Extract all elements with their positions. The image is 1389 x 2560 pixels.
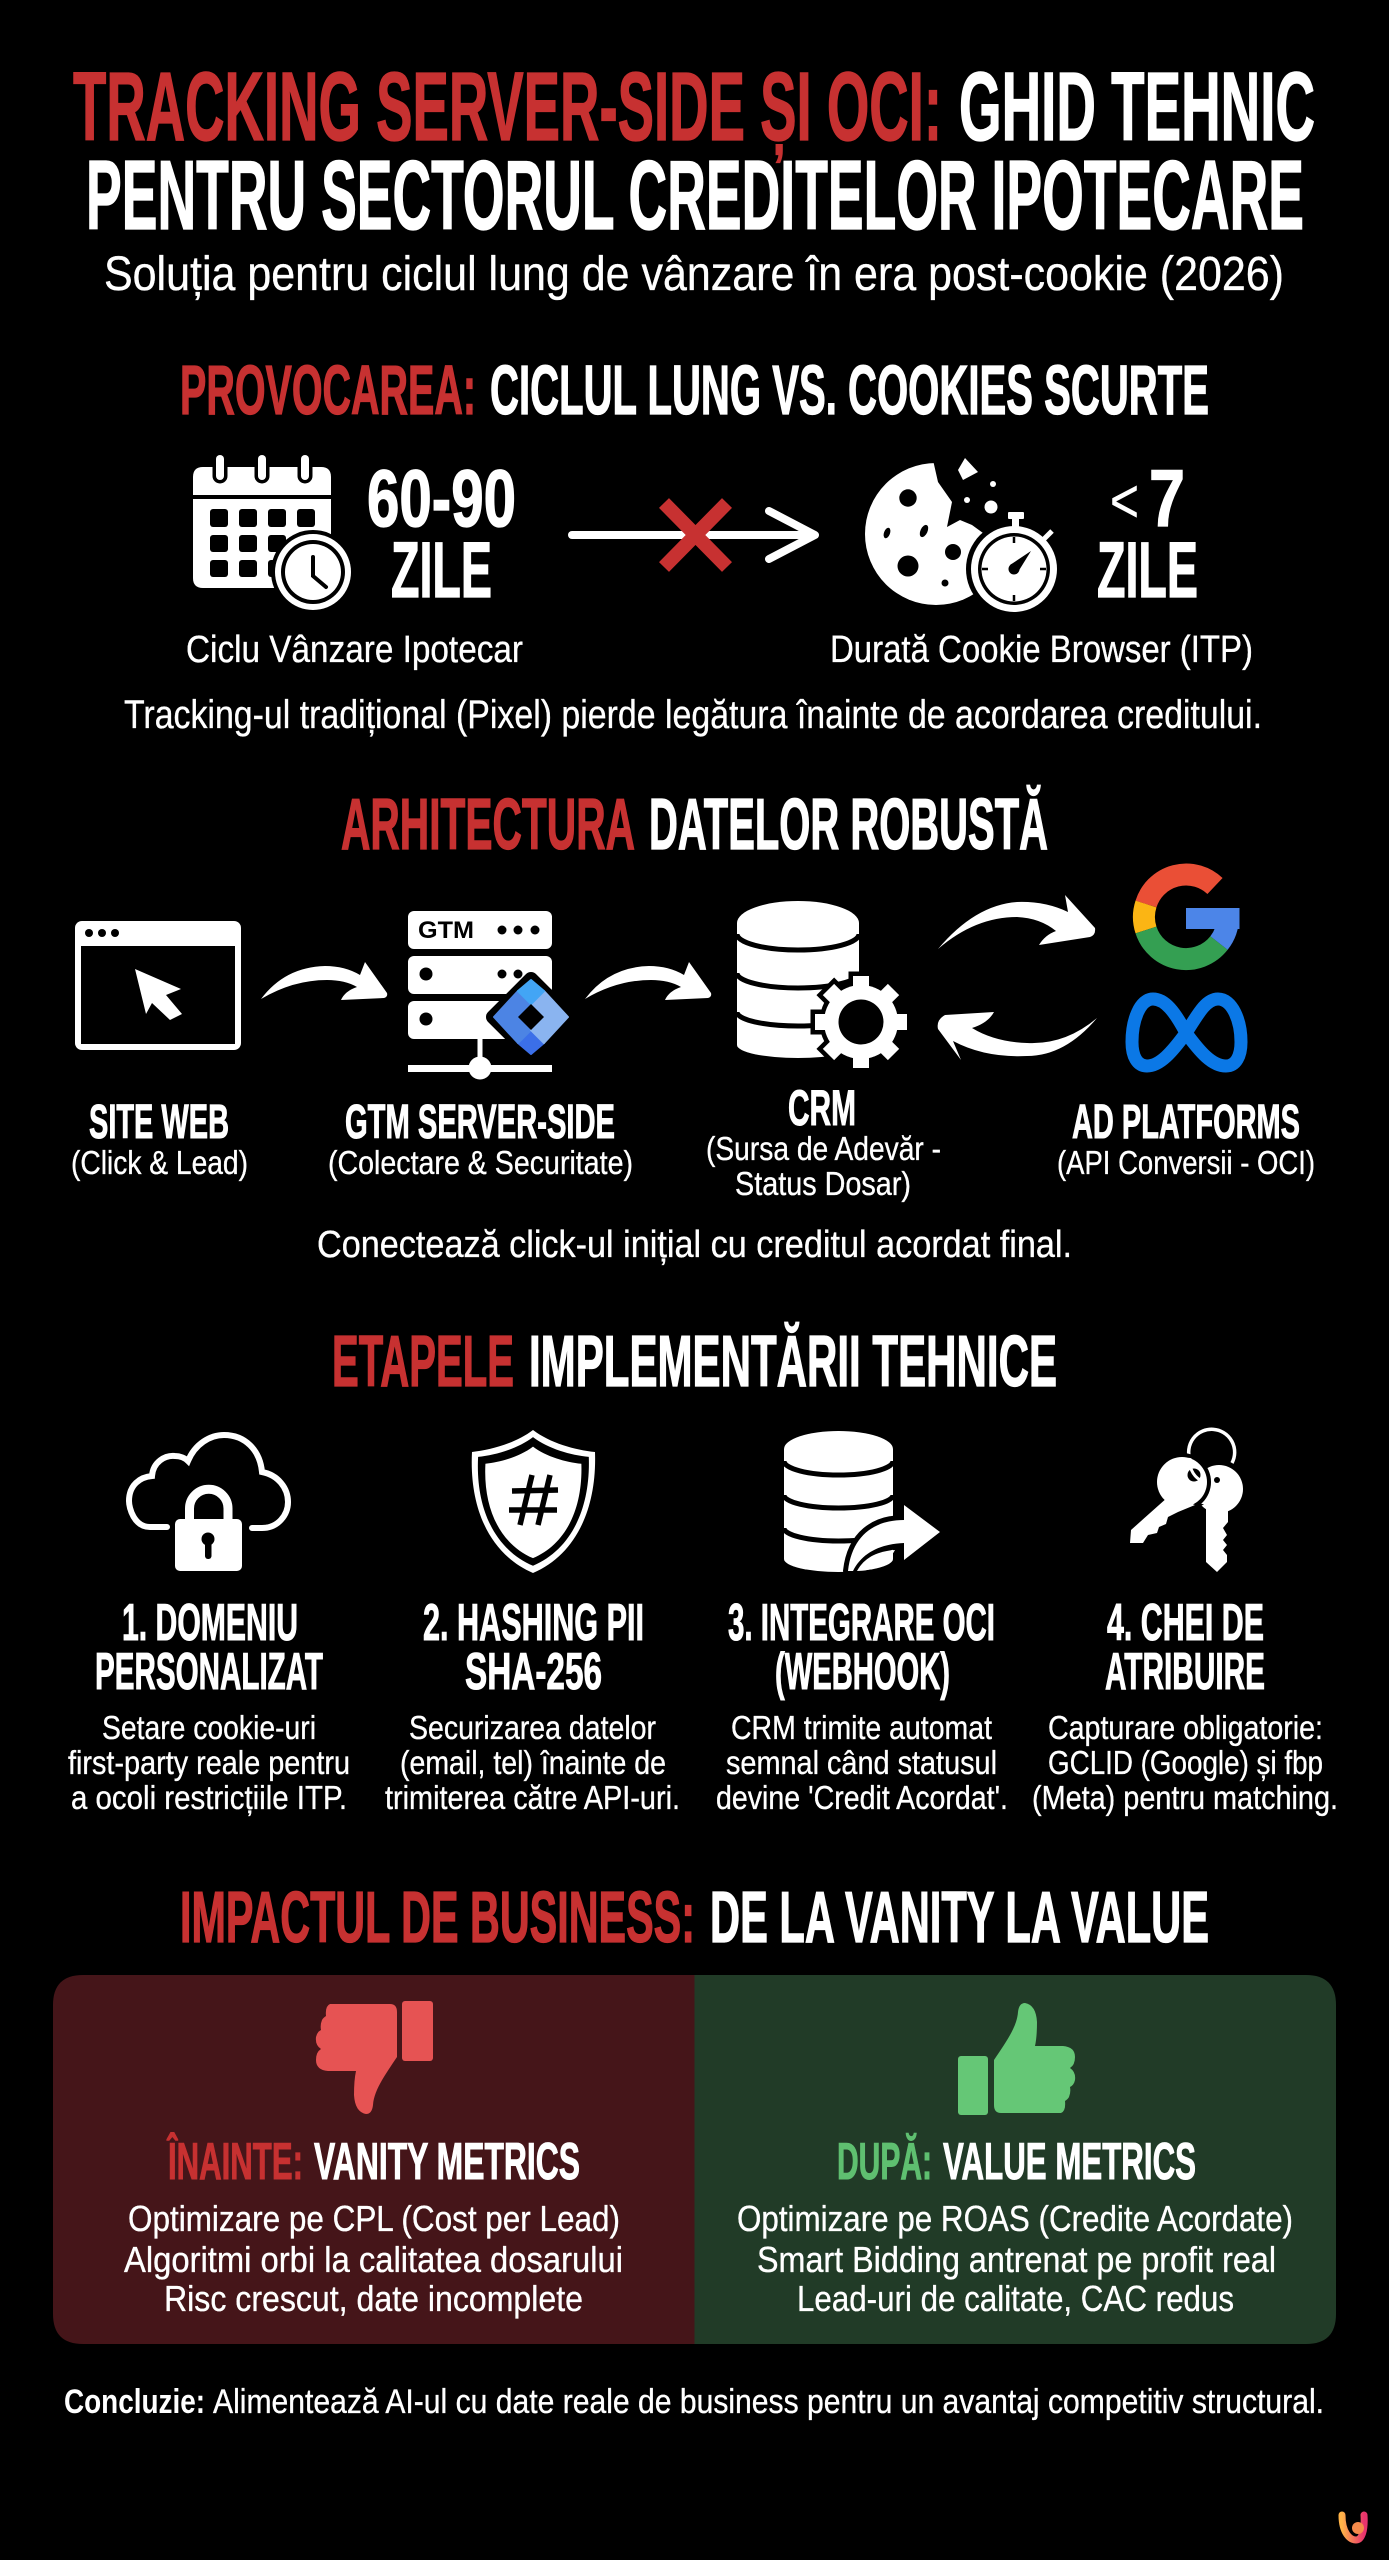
label: ad platforms [1057, 1096, 1315, 1181]
step 2 [385, 1594, 680, 1816]
step 4: GCLID (Google) și fbp [1048, 1744, 1323, 1781]
icon: calendar with clock [193, 459, 355, 614]
step 3: (WEBHOOK) [775, 1643, 950, 1701]
text: inainte list: Optimizare pe CPL (Cost per Lead) [128, 2198, 620, 2239]
icon: google [1144, 874, 1240, 959]
icon: meta [1132, 999, 1241, 1066]
step 1: a ocoli restricțiile ITP. [71, 1779, 347, 1816]
step 2: SHA-256 [465, 1643, 602, 1701]
heading: arhitectura: DATELOR ROBUSTĂ [649, 785, 1048, 865]
step 1 [68, 1594, 350, 1816]
label: site web [71, 1096, 248, 1181]
text: dupa list: Smart Bidding antrenat pe profit real [757, 2239, 1276, 2280]
label: inainte [166, 2132, 580, 2191]
arrow: site to gtm [261, 962, 387, 1000]
arrow: platforms to crm [938, 1012, 1097, 1060]
stat: 60-90 zile [367, 454, 516, 614]
stat: 60-90 zile: ZILE [391, 525, 492, 614]
label: ad platforms: (API Conversii - OCI) [1057, 1144, 1315, 1181]
label: crm [706, 1080, 941, 1202]
step 3: semnal când statusul [726, 1744, 997, 1781]
text: inainte list: Risc crescut, date incomplete [164, 2278, 583, 2319]
icon: gtm server [408, 911, 569, 1080]
subtitle: Soluția pentru ciclul lung de vânzare în era post-cookie (2026) [104, 248, 1284, 301]
panel: inainte [53, 1975, 694, 2344]
heading: arhitectura: ARHITECTURA [341, 785, 635, 865]
stat: sub 7 zile: ZILE [1097, 525, 1198, 614]
step 4 [1032, 1594, 1338, 1816]
label: site web: (Click & Lead) [71, 1144, 248, 1181]
step 1: first-party reale pentru [68, 1744, 350, 1781]
text: dupa list [737, 2198, 1293, 2319]
stat: sub 7 zile: < [1110, 467, 1139, 536]
stat: sub 7 zile: 7 [1149, 454, 1185, 544]
panel: dupa [694, 1975, 1336, 2344]
arrow: crm to platforms [938, 895, 1095, 949]
step 3: 3. INTEGRARE OCI [728, 1594, 995, 1652]
heading: provocarea [180, 351, 1209, 429]
label: crm: Status Dosar) [735, 1165, 911, 1202]
icon: thumbs up [958, 2003, 1075, 2115]
icon: hash shield [472, 1430, 595, 1573]
icon: cloud lock [129, 1435, 288, 1571]
icon: keys [1130, 1429, 1243, 1572]
heading: etapele: ETAPELE [332, 1322, 514, 1402]
label: gtm server-side: GTM SERVER-SIDE [345, 1096, 615, 1149]
step 1: Setare cookie-uri [102, 1709, 316, 1746]
text: conecteaza: Conectează click-ul inițial cu creditul acordat final. [317, 1224, 1072, 1266]
panel: provocarea [124, 351, 1262, 737]
label: crm: CRM [788, 1080, 856, 1136]
icon: gtm server: GTM [418, 917, 474, 944]
heading: etapele [332, 1322, 1057, 1402]
step 2: 2. HASHING PII [423, 1594, 644, 1652]
arrow: broken link [572, 503, 815, 567]
step 3: devine 'Credit Acordat'. [716, 1779, 1008, 1816]
icon: thumbs down [316, 2001, 433, 2114]
step 3 [716, 1594, 1008, 1816]
text: dupa list: Optimizare pe ROAS (Credite Acordate) [737, 2198, 1293, 2239]
step 3: CRM trimite automat [731, 1709, 992, 1746]
step 4: Capturare obligatorie: [1048, 1709, 1323, 1746]
label: gtm server-side: (Colectare & Securitate) [328, 1144, 633, 1181]
label: durata cookie: Durată Cookie Browser (ITP) [830, 629, 1253, 671]
panel: etapele [68, 1322, 1338, 1816]
label: crm: (Sursa de Adevăr - [706, 1130, 941, 1167]
heading: impact: IMPACTUL DE BUSINESS: [180, 1878, 695, 1958]
stat: sub 7 zile [1097, 454, 1198, 614]
stat: 60-90 zile: 60-90 [367, 454, 516, 544]
label: inainte: ÎNAINTE: [166, 2132, 303, 2191]
title [73, 52, 1315, 250]
label: dupa: DUPĂ: [837, 2133, 932, 2191]
label: ciclu vanzare: Ciclu Vânzare Ipotecar [186, 629, 523, 671]
text: inainte list [124, 2198, 623, 2319]
step 1: 1. DOMENIU [122, 1594, 298, 1652]
label: gtm server-side [328, 1096, 633, 1181]
step 4: (Meta) pentru matching. [1032, 1779, 1338, 1816]
step 4: ATRIBUIRE [1105, 1643, 1265, 1701]
step 1: PERSONALIZAT [95, 1643, 323, 1701]
text: dupa list: Lead-uri de calitate, CAC redus [797, 2278, 1234, 2319]
step 2: trimiterea către API-uri. [385, 1779, 680, 1816]
icon: database share [784, 1431, 940, 1572]
icon: browser window [75, 921, 241, 1050]
text: inainte list: Algoritmi orbi la calitatea dosarului [124, 2239, 623, 2280]
arrow: gtm to crm [585, 962, 711, 1000]
step 2: Securizarea datelor [409, 1709, 656, 1746]
conclusion: Concluzie: [64, 2383, 205, 2421]
label: site web: SITE WEB [89, 1096, 229, 1149]
icon: corner logo [1342, 2515, 1364, 2540]
step 2: (email, tel) înainte de [400, 1744, 666, 1781]
panel: impact [53, 1878, 1336, 2344]
label: dupa [837, 2133, 1196, 2191]
label: inainte: VANITY METRICS [314, 2133, 580, 2191]
heading: provocarea: PROVOCAREA: [180, 351, 476, 429]
step 4: 4. CHEI DE [1107, 1594, 1264, 1652]
panel: arhitectura [71, 785, 1315, 1266]
label: dupa: VALUE METRICS [943, 2133, 1196, 2191]
icon: cookie with stopwatch [865, 450, 1062, 617]
icon: database with gear [737, 901, 907, 1068]
